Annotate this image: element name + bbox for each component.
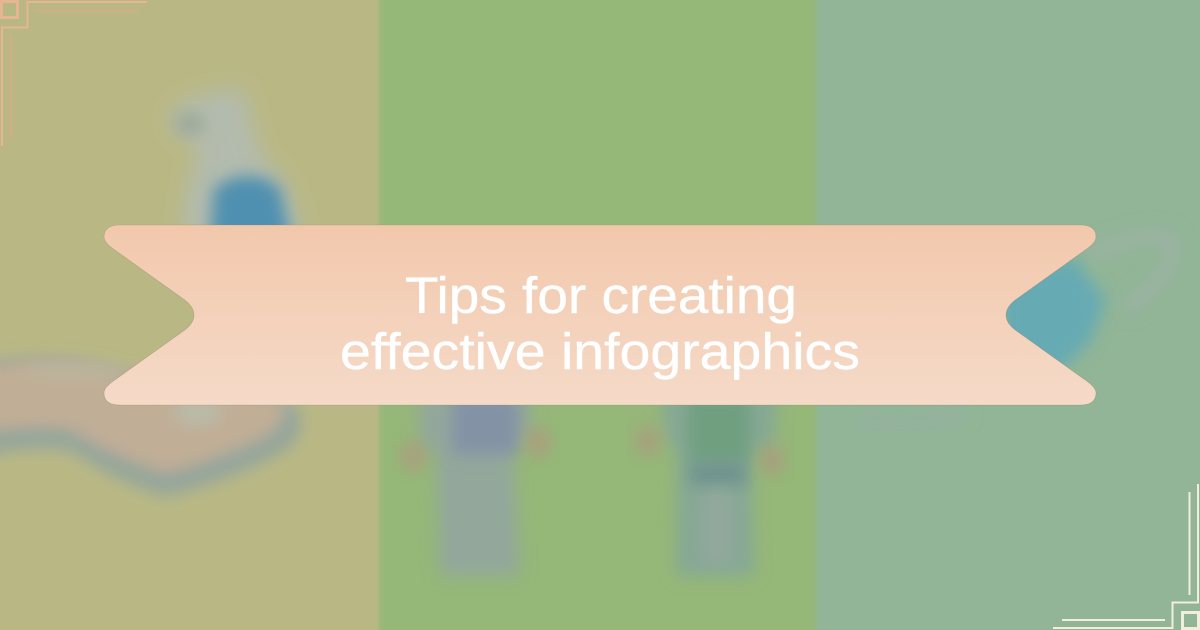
title: effective infographics (340, 323, 860, 380)
corner ornament: top left (2, 2, 147, 146)
title (340, 267, 860, 380)
ribbon banner (104, 225, 1096, 405)
blurred illustration: face mask (860, 236, 1173, 426)
corner ornament: bottom right (1053, 484, 1198, 628)
blurred illustration: left figure (401, 396, 550, 575)
blurred illustration: open hand (0, 359, 301, 496)
blurred illustration: bird with blue body (172, 91, 302, 250)
blurred illustration: right figure (636, 396, 784, 575)
title: Tips for creating (405, 267, 797, 324)
